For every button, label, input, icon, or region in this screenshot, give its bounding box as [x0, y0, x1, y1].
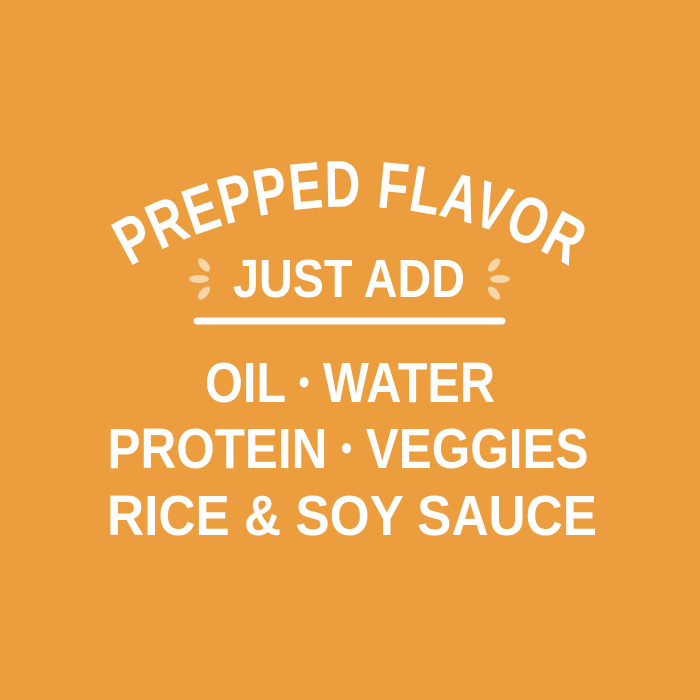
icon: left sparkles — [189, 256, 212, 302]
line 1: oil water: OIL — [205, 351, 299, 415]
line 2: protein veggies: VEGGIES — [352, 417, 588, 481]
title: prepped flavor arched: PREPPED FLAVOR — [111, 161, 585, 266]
line 2: protein veggies: PROTEIN — [108, 417, 361, 481]
divider line — [197, 318, 502, 324]
icon: right sparkles — [486, 256, 510, 302]
line 2: protein veggies: • — [341, 427, 352, 468]
line 1: oil water: WATER — [309, 351, 495, 415]
line 3: rice soy sauce: RICE & SOY SAUCE — [107, 484, 597, 548]
subtitle: just add: JUST ADD — [233, 249, 465, 309]
ingredients list — [107, 351, 597, 548]
line 1: oil water: • — [299, 361, 309, 402]
